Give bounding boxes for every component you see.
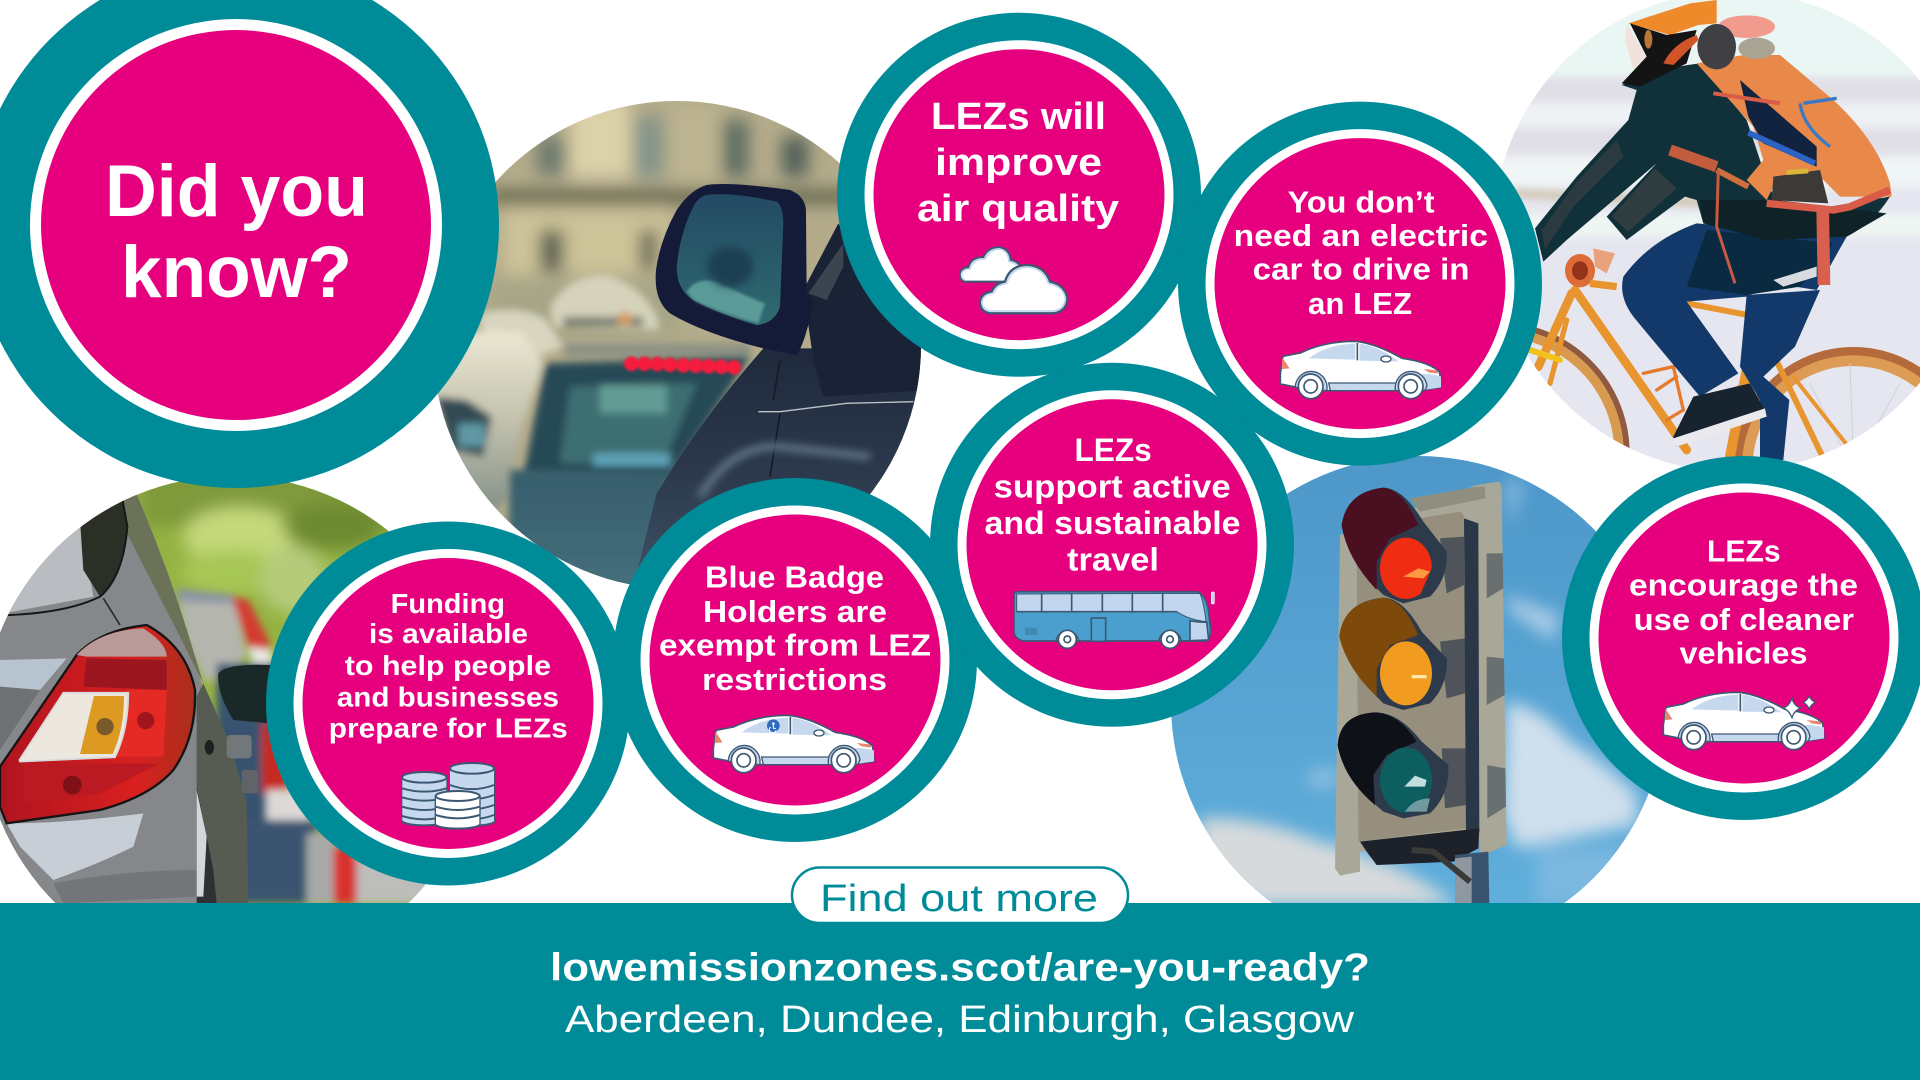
text: funding: and businesses — [337, 682, 559, 713]
text: funding: Funding — [391, 588, 505, 619]
panel: Did you know — [0, 0, 499, 488]
shoe — [1735, 384, 1742, 387]
text: no electric car needed — [1234, 184, 1488, 321]
heading: did you know — [105, 151, 368, 313]
text: funding: prepare for LEZs — [329, 713, 568, 744]
text: cleaner vehicles: LEZs — [1707, 534, 1781, 569]
text: improve air quality: LEZs will — [931, 96, 1106, 138]
button: find out more — [792, 868, 1128, 923]
text: blue badge — [659, 560, 931, 697]
helmet and head — [1628, 0, 1717, 35]
text: no electric car needed: You don’t — [1288, 184, 1435, 220]
text: active travel: travel — [1067, 542, 1159, 578]
text: cleaner vehicles: use of cleaner — [1634, 602, 1854, 637]
text: active travel: support active — [994, 468, 1231, 504]
text: cleaner vehicles: vehicles — [1680, 636, 1808, 671]
text: improve air quality — [917, 96, 1119, 230]
heading: did you know: Did you — [105, 151, 368, 232]
panel: improve air quality — [837, 13, 1201, 377]
photo: rear light of a parked car — [0, 470, 430, 910]
front wheel — [1735, 347, 1920, 456]
red lamp — [1342, 488, 1447, 603]
panel: funding — [266, 522, 630, 886]
text: active travel — [984, 432, 1240, 578]
text: no electric car needed: need an electric — [1234, 218, 1488, 253]
footer banner — [0, 903, 1920, 1080]
text: blue badge: restrictions — [702, 662, 887, 697]
text: no electric car needed: an LEZ — [1308, 286, 1412, 321]
jacket — [1535, 63, 1890, 262]
text: blue badge: Holders are — [703, 594, 887, 629]
backing board — [1335, 482, 1507, 876]
button: find out more: Find out more — [820, 878, 1098, 920]
text: active travel: LEZs — [1074, 432, 1152, 468]
text: active travel: and sustainable — [984, 505, 1240, 541]
panel: active and sustainable travel — [930, 363, 1294, 727]
signal housing — [1357, 512, 1467, 842]
photo: traffic light against blue sky — [1171, 456, 1649, 903]
photo: cyclist with orange bike — [1502, 0, 1920, 466]
icon: coach bus — [1014, 592, 1214, 648]
text: cleaner vehicles: encourage the — [1629, 568, 1858, 602]
icon: stacks of coins — [402, 763, 494, 829]
heading: did you know: know? — [121, 232, 352, 313]
backpack — [1697, 55, 1892, 200]
panel: cleaner vehicles — [1562, 456, 1920, 820]
footer cities: Aberdeen, Dundee, Edinburgh, Glasgow — [565, 999, 1355, 1041]
icon: car with blue badge — [713, 715, 874, 773]
text: blue badge: exempt from LEZ — [659, 628, 931, 662]
text: cleaner vehicles — [1629, 534, 1858, 671]
text: no electric car needed: car to drive in — [1253, 252, 1470, 286]
icon: clouds — [960, 247, 1067, 313]
panel: no electric car needed — [1178, 102, 1542, 466]
icon: clean car with sparkles — [1663, 692, 1824, 750]
panel: blue badge — [613, 478, 977, 842]
text: funding: is available — [369, 618, 528, 649]
icon: car — [1280, 341, 1441, 399]
text: funding: to help people — [345, 650, 551, 681]
text: funding — [329, 588, 568, 744]
text: blue badge: Blue Badge — [705, 560, 884, 594]
tail lamp — [0, 625, 195, 823]
green lamp — [1338, 712, 1448, 818]
photo: wing mirror in traffic — [430, 100, 930, 600]
amber lamp — [1339, 598, 1447, 710]
text: improve air quality: improve — [935, 142, 1102, 184]
jeans — [1622, 223, 1847, 397]
footer link: lowemissionzones.scot/are-you-ready? — [550, 946, 1370, 990]
text: improve air quality: air quality — [917, 188, 1119, 230]
